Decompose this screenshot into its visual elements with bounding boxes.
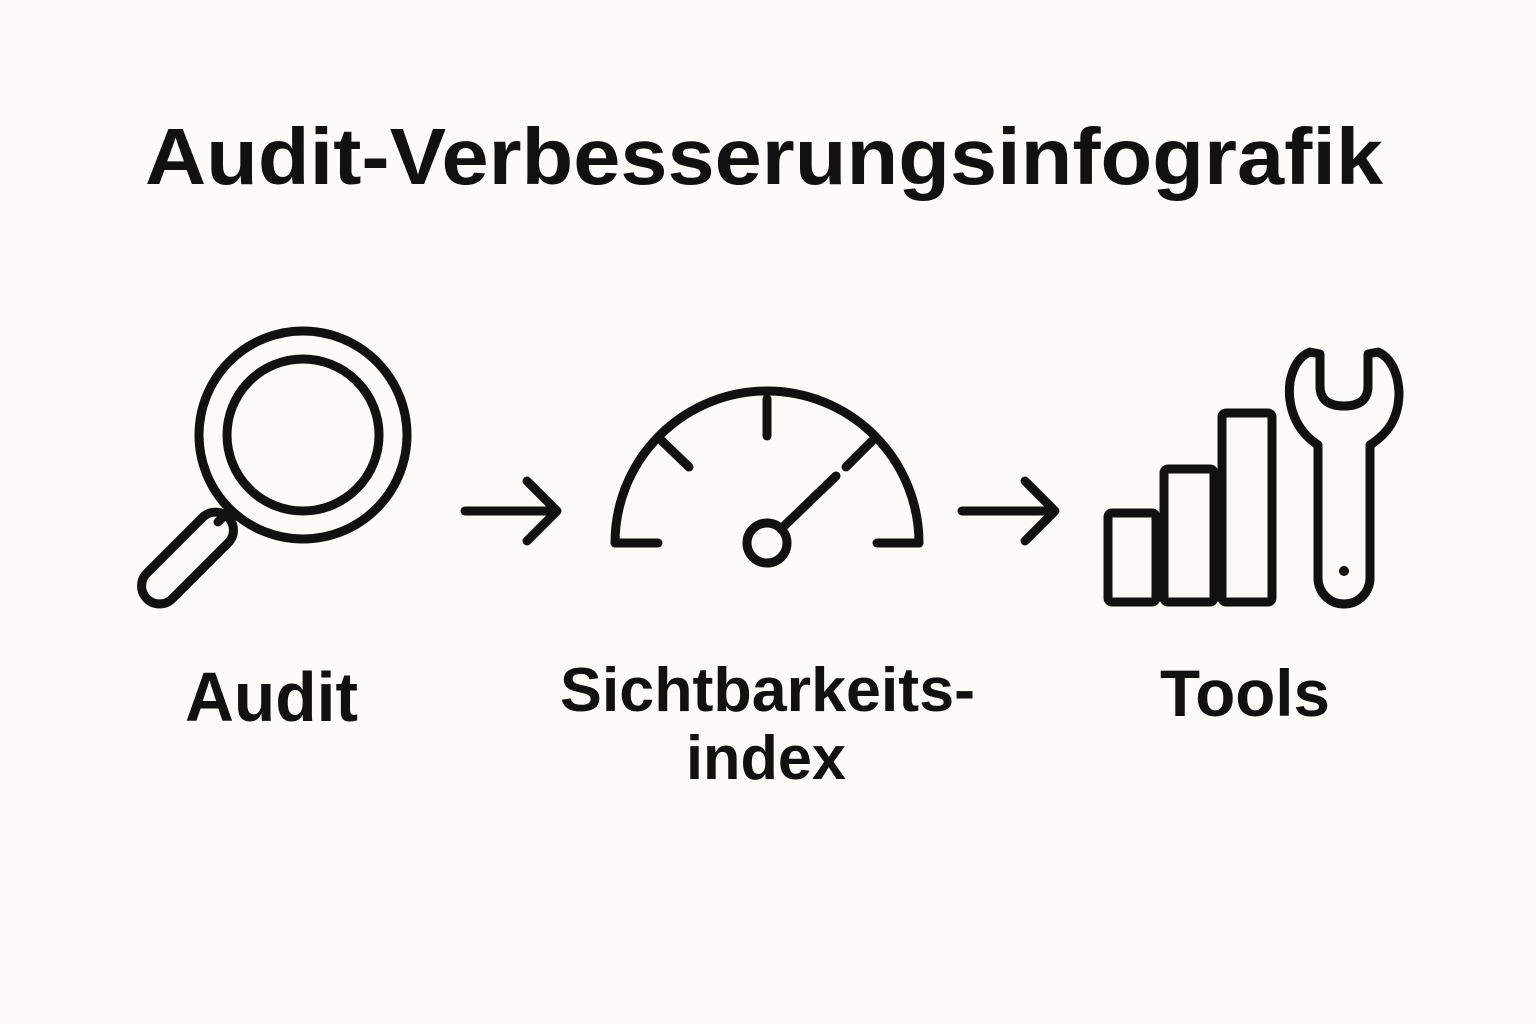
arrow: audit to index <box>465 481 557 541</box>
icon: bar chart <box>1108 413 1272 602</box>
icon: gauge <box>615 391 919 563</box>
label: Sichtbarkeitsindex <box>560 656 975 793</box>
label: Sichtbarkeitsindex: index <box>686 724 847 793</box>
label: Tools: Tools <box>1160 656 1330 730</box>
icon: wrench <box>1289 352 1399 604</box>
label: Audit: Audit <box>185 658 358 736</box>
arrow: index to tools <box>962 481 1055 541</box>
icon: magnifying glass <box>134 331 407 611</box>
label: Sichtbarkeitsindex: Sichtbarkeits- <box>560 656 975 725</box>
title: Audit-Verbesserungsinfografik <box>145 112 1384 201</box>
